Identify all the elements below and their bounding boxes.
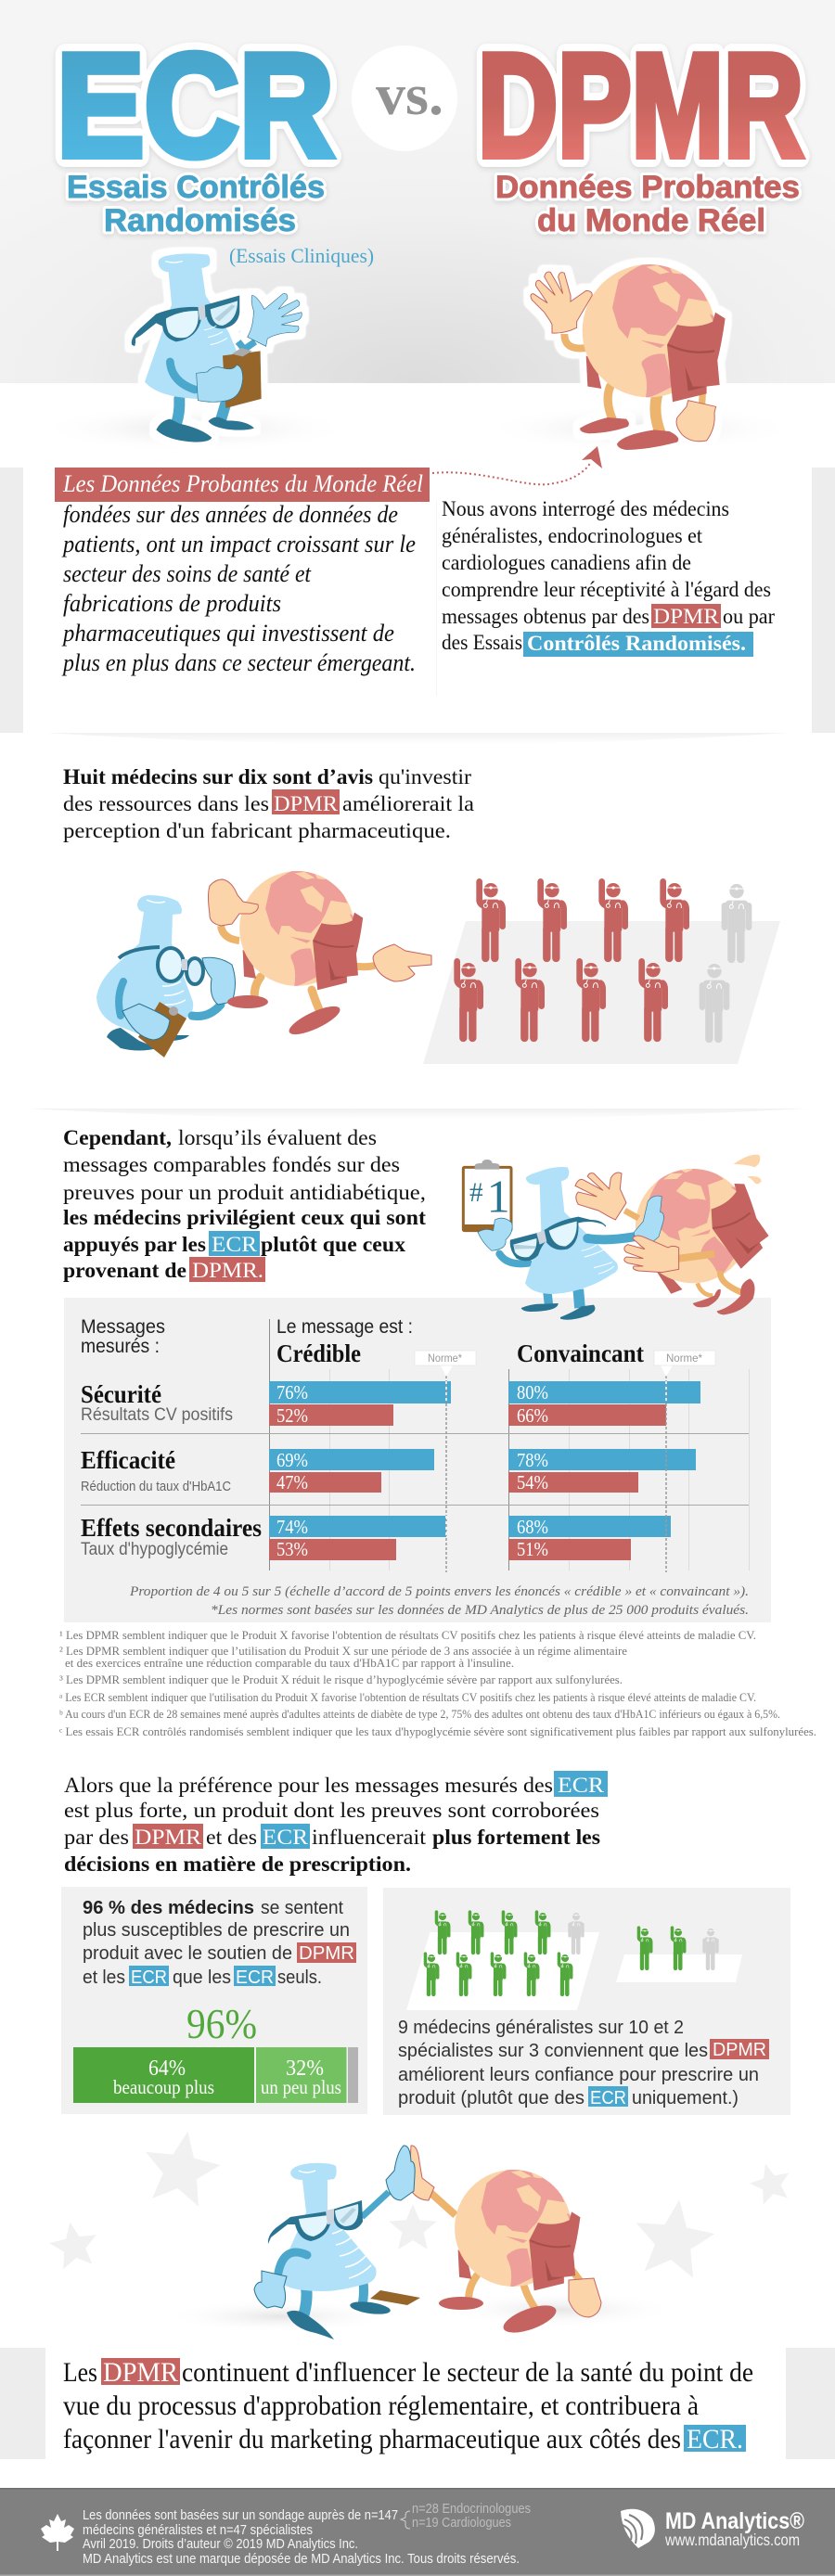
text block: conclusion: ECR. <box>687 2424 743 2454</box>
character scene: flask and globe pointing <box>96 869 431 1057</box>
text block: survey description: Contrôlés Randomisés. <box>527 632 746 655</box>
chart column headers: Convaincant <box>517 1339 644 1367</box>
subtitle: DPMR: du Monde Réel <box>537 203 765 238</box>
text block: conclusion: Les <box>63 2357 97 2388</box>
row: side effects: Taux d'hypoglycémie <box>81 1540 228 1559</box>
footnotes: ᵇ Au cours d'un ECR de 28 semaines mené auprès d'adultes atteints de diabète de type 2, 75% des adultes ont obtenu des taux d'HbA1C inférieurs ou égaux à 6,5%. <box>59 1708 780 1721</box>
clipboard: number one: 1 <box>487 1171 510 1223</box>
subtitle: DPMR <box>495 170 800 238</box>
text block: however, physicians favour RCT: preuves pour un produit antidiabétique, <box>63 1181 426 1204</box>
chart notes: *Les normes sont basées sur les données de MD Analytics de plus de 25 000 produits évalués. <box>211 1603 749 1618</box>
row: side effects: Effets secondaires <box>81 1514 262 1542</box>
text block: however, physicians favour RCT <box>63 1126 426 1282</box>
chart notes: Proportion de 4 ou 5 sur 5 (échelle d’accord de 5 points envers les énoncés « crédible » et « convaincant »). <box>129 1584 749 1599</box>
text block: however, physicians favour RCT: les médecins privilégient ceux qui sont <box>63 1206 426 1229</box>
text block: survey description: des Essais <box>442 631 522 654</box>
text block: however, physicians favour RCT: messages comparables fondés sur des <box>63 1153 400 1176</box>
pictogram: general practitioners <box>406 1912 599 2010</box>
logo: MD Analytics <box>621 2508 804 2549</box>
character: globe <box>429 2168 601 2339</box>
heading: combined evidence: et des <box>206 1826 257 1849</box>
row: side effects <box>81 1514 671 1560</box>
stacked bar: 32% <box>286 2057 324 2081</box>
panel text <box>83 1898 356 1988</box>
sample breakdown: n=19 Cardiologues <box>412 2516 511 2531</box>
heading: eight of ten physicians: DPMR <box>274 792 339 815</box>
heading: combined evidence: ECR <box>263 1826 309 1849</box>
sample breakdown: n=28 Endocrinologues <box>412 2502 531 2517</box>
row: safety: Sécurité <box>81 1380 161 1408</box>
subtitle note: (Essais Cliniques) <box>229 244 374 267</box>
heading: combined evidence <box>64 1771 608 1876</box>
text block: however, physicians favour RCT: lorsqu’ils évaluent des <box>178 1126 377 1149</box>
text block: real-world data definition: fabrications de produits <box>63 590 281 617</box>
row: side effects: 53% <box>276 1538 308 1560</box>
subtitle: DPMR: du Monde Réel <box>537 203 765 238</box>
panel: conclusion strips <box>0 2348 835 2459</box>
footnotes: ᶜ Les essais ECR contrôlés randomisés semblent indiquer que les taux d'hypoglycémie sévère sont significativement plus faibles par rapport aux sulfonylurées. <box>59 1725 816 1738</box>
text block: real-world data definition: secteur des soins de santé et <box>63 560 312 587</box>
icon: maple leaf <box>41 2514 74 2551</box>
character scene: flask showing #1, globe pushed back <box>462 1143 780 1320</box>
chart gridlines <box>81 1319 750 1570</box>
footer text: Avril 2019. Droits d’auteur © 2019 MD Analytics Inc. <box>83 2537 358 2552</box>
row: efficacy: Efficacité <box>81 1446 175 1474</box>
panel text: DPMR <box>299 1943 354 1964</box>
footer band <box>0 2488 835 2576</box>
heading: combined evidence: Alors que la préférence pour les messages mesurés des <box>64 1774 553 1797</box>
row: efficacy <box>81 1446 696 1494</box>
panel: intro side strips <box>0 468 835 733</box>
text block: however, physicians favour RCT: Cependant, <box>63 1126 172 1149</box>
footer text: MD Analytics est une marque déposée de MD Analytics Inc. Tous droits réservés. <box>83 2552 520 2567</box>
subtitle: DPMR: Données Probantes <box>495 170 800 205</box>
text block: real-world data definition: Les Données Probantes du Monde Réel <box>62 470 423 497</box>
character scene: high five <box>254 2146 601 2339</box>
heading: combined evidence: décisions en matière de prescription. <box>64 1852 411 1876</box>
row: efficacy: 78% <box>517 1449 548 1471</box>
row: safety <box>81 1380 700 1427</box>
footer text: médecins généralistes et n=47 spécialistes <box>83 2523 313 2538</box>
floor shadows <box>37 404 798 453</box>
panel text: se sentent <box>261 1898 343 1918</box>
norm markers <box>415 1351 715 1572</box>
text block: however, physicians favour RCT: appuyés par les <box>63 1233 206 1256</box>
chart column headers <box>81 1316 644 1367</box>
panel text: ECR <box>590 2088 626 2108</box>
row: efficacy: Réduction du taux d'HbA1C <box>81 1479 231 1494</box>
subtitle: ECR: Randomisés <box>104 203 296 238</box>
row: efficacy: 69% <box>276 1449 308 1471</box>
character: flask <box>96 895 236 1057</box>
chart column headers: Le message est : <box>276 1316 413 1338</box>
character: globe <box>208 869 431 1040</box>
row: side effects: 51% <box>517 1538 548 1560</box>
pictogram: 8 of 10 physicians <box>423 881 780 1064</box>
panel: bar chart <box>64 1298 771 1622</box>
heading: combined evidence: DPMR <box>135 1826 202 1849</box>
row: safety: Résultats CV positifs <box>81 1405 233 1425</box>
title: ECR: ECR <box>57 24 334 187</box>
footer text <box>83 2508 520 2567</box>
row: safety: 52% <box>276 1404 308 1427</box>
footnotes: et des exercices entraîne une réduction comparable du taux d'HbA1C par rapport à l'insuline. <box>65 1657 514 1670</box>
text block: conclusion: vue du processus d'approbation réglementaire, et contribuera à <box>63 2390 699 2421</box>
panel text: ECR <box>236 1967 274 1988</box>
panel text: améliorent leurs confiance pour prescrire un <box>398 2065 759 2085</box>
text block: however, physicians favour RCT: plutôt que ceux <box>261 1233 406 1256</box>
title: ECR: ECR <box>57 24 334 187</box>
subtitle: ECR: Essais Contrôlés <box>67 170 325 205</box>
subtitle: DPMR: Données Probantes <box>495 170 800 205</box>
character: flask with clipboard <box>499 1167 679 1320</box>
stacked bar: beaucoup plus <box>113 2076 214 2098</box>
clipboard: number one: # <box>469 1178 483 1208</box>
subtitle: ECR: Randomisés <box>104 203 296 238</box>
row: safety: 66% <box>517 1404 548 1427</box>
footnotes: ³ Les DPMR semblent indiquer que le Produit X réduit le risque d’hypoglycémie sévère par rapport aux sulfonylurées. <box>59 1673 623 1686</box>
logo: MD Analytics: MD Analytics® <box>665 2508 804 2534</box>
norm markers: Norme* <box>666 1352 702 1365</box>
panel text: ECR <box>131 1967 167 1988</box>
text block: however, physicians favour RCT: ECR <box>212 1233 258 1256</box>
text block: survey description <box>442 497 775 657</box>
heading: eight of ten physicians: améliorerait la <box>342 792 474 815</box>
row: side effects: 74% <box>276 1516 308 1538</box>
heading: combined evidence: influencerait <box>312 1826 427 1849</box>
stacked bar: un peu plus <box>261 2076 341 2098</box>
text block: survey description: DPMR <box>653 605 720 628</box>
panel text: plus susceptibles de prescrire un <box>83 1920 350 1941</box>
panel text: produit (plutôt que des <box>398 2088 584 2108</box>
footer text: Les données sont basées sur un sondage auprès de n=147 <box>83 2508 398 2523</box>
versus badge: vs. <box>376 64 443 127</box>
footnotes: ᵃ Les ECR semblent indiquer que l'utilisation du Produit X favorise l'obtention de résultats CV positifs chez les patients à risque élevé atteints de maladie CV. <box>59 1691 756 1704</box>
text block: real-world data definition <box>55 468 430 676</box>
text block: however, physicians favour RCT: DPMR. <box>192 1259 263 1282</box>
character: globe recoiling <box>575 1143 780 1314</box>
stacked bar <box>73 2047 358 2103</box>
panel text: spécialistes sur 3 conviennent que les <box>398 2041 708 2061</box>
heading: combined evidence: par des <box>64 1826 129 1849</box>
row: efficacy: 47% <box>276 1471 308 1493</box>
text block: survey description: comprendre leur réceptivité à l'égard des <box>442 578 771 601</box>
subtitle: ECR: Essais Contrôlés <box>67 170 325 205</box>
footnotes: ¹ Les DPMR semblent indiquer que le Produit X favorise l'obtention de résultats CV positifs chez les patients à risque élevé atteints de maladie CV. <box>59 1629 756 1642</box>
stacked bar: 64% <box>148 2057 186 2081</box>
chart notes <box>129 1584 749 1618</box>
heading: combined evidence: ECR <box>558 1774 605 1797</box>
text block: conclusion: continuent d'influencer le secteur de la santé du point de <box>182 2357 753 2388</box>
panel text: uniquement.) <box>632 2088 739 2108</box>
panel text: 9 médecins généralistes sur 10 et 2 <box>398 2018 684 2038</box>
heading: combined evidence: est plus forte, un produit dont les preuves sont corroborées <box>64 1799 599 1822</box>
chart column headers: Messages <box>81 1316 165 1338</box>
high-five hands <box>386 2146 434 2200</box>
panel text: produit avec le soutien de <box>83 1943 292 1964</box>
panel text: que les <box>173 1967 231 1988</box>
text block: conclusion: façonner l'avenir du marketing pharmaceutique aux côtés des <box>63 2424 681 2454</box>
ground shadows <box>163 2291 675 2333</box>
heading: eight of ten physicians: Huit médecins sur dix sont d’avis <box>63 765 373 788</box>
panel: 96% of physicians <box>61 1887 367 2114</box>
row: side effects: 68% <box>517 1516 548 1538</box>
row: safety: 76% <box>276 1381 308 1403</box>
header backdrop <box>0 0 835 383</box>
subtitle: ECR <box>67 170 325 238</box>
heading: eight of ten physicians: qu'investir <box>379 765 471 788</box>
norm markers: Norme* <box>428 1352 462 1365</box>
footnotes <box>59 1629 816 1738</box>
text block: conclusion: DPMR <box>103 2357 178 2388</box>
character: flask <box>254 2163 420 2339</box>
heading: combined evidence: plus fortement les <box>432 1826 600 1849</box>
dotted arrow <box>432 446 602 484</box>
text block: survey description: messages obtenus par des <box>442 605 649 628</box>
panel text: seuls. <box>277 1967 322 1988</box>
text block: real-world data definition: patients, ont un impact croissant sur le <box>61 531 416 557</box>
text block: however, physicians favour RCT: provenant de <box>63 1259 186 1282</box>
text block: real-world data definition: fondées sur des années de données de <box>63 501 398 528</box>
character: globe waving <box>531 263 726 450</box>
text block: real-world data definition: pharmaceutiques qui investissent de <box>61 620 394 647</box>
panel text: 96 % des médecins <box>83 1898 254 1918</box>
text block: survey description: ou par <box>723 605 775 628</box>
heading: eight of ten physicians: perception d'un fabricant pharmaceutique. <box>63 819 451 842</box>
text block: conclusion <box>63 2357 753 2454</box>
logo: MD Analytics: www.mdanalytics.com <box>664 2531 800 2549</box>
text block: survey description: cardiologues canadiens afin de <box>442 551 691 574</box>
text block: survey description: généralistes, endocrinologues et <box>442 524 703 547</box>
row: efficacy: 54% <box>517 1471 548 1493</box>
row: safety: 80% <box>517 1381 548 1403</box>
chart column headers: Crédible <box>276 1339 361 1367</box>
footnotes: ² Les DPMR semblent indiquer que l’utilisation du Produit X sur une période de 3 ans associée à un régime alimentaire <box>59 1645 627 1658</box>
panel text <box>398 2018 769 2108</box>
pictogram: specialists <box>616 1928 742 1982</box>
heading: eight of ten physicians <box>63 765 474 842</box>
heading: eight of ten physicians: des ressources dans les <box>63 792 269 815</box>
panel text: et les <box>83 1967 125 1988</box>
text block: survey description: Nous avons interrogé des médecins <box>442 497 729 520</box>
character: flask with clipboard <box>132 253 302 442</box>
chart column headers: mesurés : <box>81 1336 160 1357</box>
clipboard: number one <box>462 1160 512 1250</box>
panel text: DPMR <box>713 2040 766 2060</box>
big percentage: 96% <box>186 2000 257 2047</box>
decorative stars <box>46 2125 795 2280</box>
panel: 9 of 10 GPs and 2 of 3 specialists <box>383 1888 790 2115</box>
text block: real-world data definition: plus en plus dans ce secteur émergeant. <box>61 649 416 676</box>
versus badge <box>352 45 457 151</box>
sample breakdown <box>401 2502 531 2531</box>
